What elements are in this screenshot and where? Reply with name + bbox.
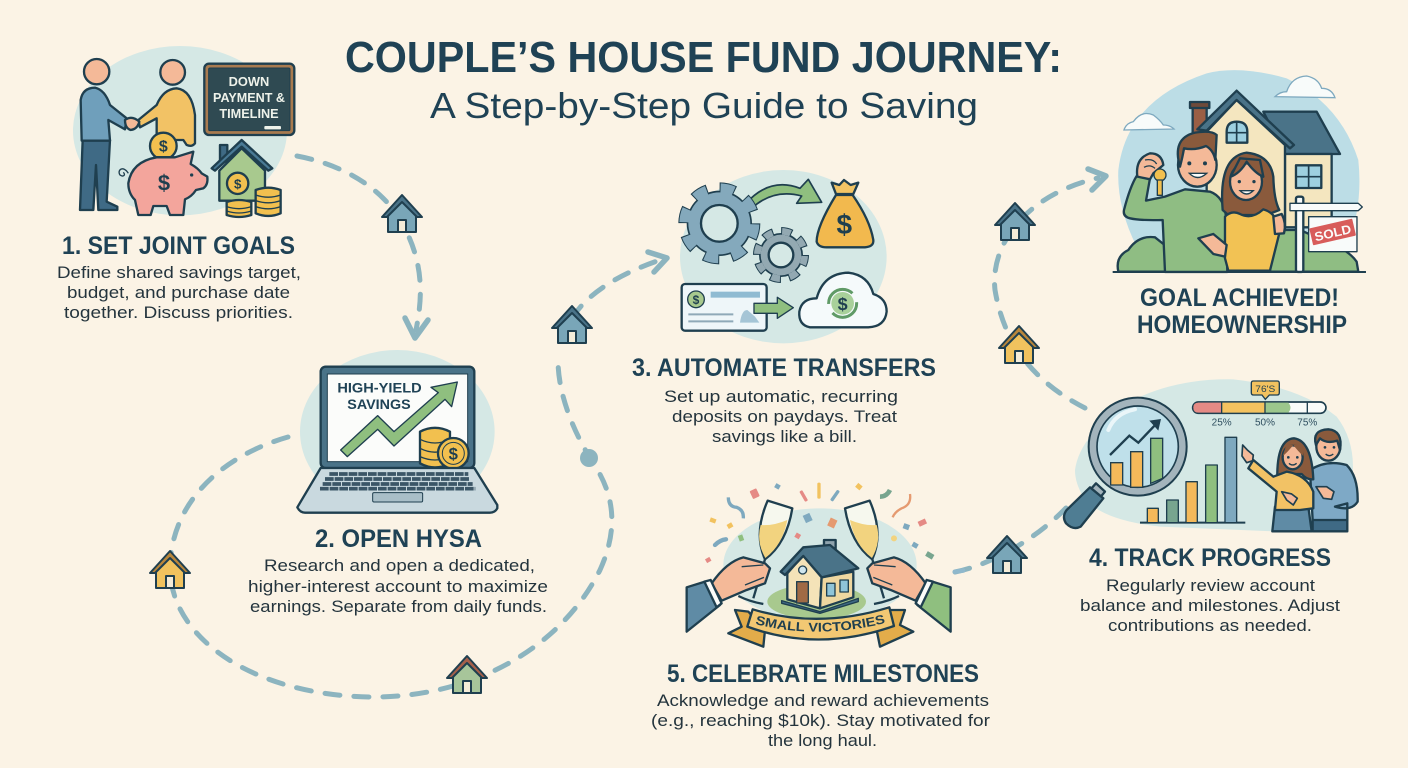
illustration: couple, chalkboard, piggy bank, house: TIMELINE — [219, 106, 279, 121]
illustration: magnifier, bar chart, progress bar, couple: 76'S — [1255, 384, 1275, 394]
text: step 4 description: Regularly review account — [1106, 576, 1315, 595]
panel: step 4 track progress — [1064, 379, 1358, 635]
text: step 5 description: the long haul. — [768, 731, 877, 750]
illustration: couple, chalkboard, piggy bank, house: PAYMENT & — [213, 90, 285, 105]
illustration: laptop with high-yield savings chart: HIGH-YIELD — [337, 379, 422, 395]
bushes — [1118, 230, 1358, 272]
panel: goal achieved — [1113, 70, 1366, 339]
text: step 1 description — [57, 263, 301, 322]
illustration: magnifier, bar chart, progress bar, couple: 25% — [1212, 418, 1232, 429]
illustration: laptop with high-yield savings chart — [297, 350, 497, 513]
text: step 5 description — [651, 691, 990, 750]
heading: step 4: 4. TRACK PROGRESS — [1089, 544, 1331, 572]
illustration: couple with keys in front of sold house — [1113, 70, 1366, 272]
dashed path: step 1 to step 2 — [297, 156, 428, 338]
panel: step 2 open HYSA — [248, 350, 548, 616]
heading: goal achieved — [1137, 284, 1347, 339]
sold sign: SOLD — [1313, 222, 1353, 244]
right glass and hand — [845, 501, 951, 632]
illustration: couple, chalkboard, piggy bank, house: $ — [234, 176, 242, 191]
text: step 5 description: (e.g., reaching $10k). Stay motivated for — [651, 711, 990, 730]
text: step 1 description: together. Discuss priorities. — [64, 303, 293, 322]
text: step 4 description: contributions as needed. — [1108, 616, 1312, 635]
text: step 5 description: Acknowledge and reward achievements — [657, 691, 989, 710]
text: step 2 description: higher-interest account to maximize — [248, 577, 548, 596]
text: step 3 description — [664, 387, 898, 446]
dashed path: step 2 to step 3 — [170, 252, 667, 697]
title: COUPLE’S HOUSE FUND JOURNEY: — [345, 33, 1062, 82]
heading: step 2: 2. OPEN HYSA — [315, 525, 482, 553]
sold sign — [1290, 197, 1362, 272]
house — [781, 540, 858, 613]
clouds — [1124, 76, 1335, 130]
illustration: gears, money bag, card and cloud: $ — [838, 294, 848, 314]
text: step 3 description: Set up automatic, recurring — [664, 387, 898, 406]
heading: goal achieved: HOMEOWNERSHIP — [1137, 311, 1347, 339]
text: step 2 description — [248, 556, 548, 616]
woman — [1198, 153, 1285, 271]
title: A Step-by-Step Guide to Saving — [430, 85, 978, 126]
panel: step 1 set joint goals — [57, 46, 301, 322]
illustration: gears, money bag, card and cloud: $ — [837, 209, 853, 240]
left glass and hand — [687, 501, 792, 632]
text: step 1 description: budget, and purchase date — [67, 283, 290, 302]
illustration: couple, chalkboard, piggy bank, house — [73, 46, 294, 217]
heading: step 5: 5. CELEBRATE MILESTONES — [667, 660, 979, 688]
banner — [727, 606, 914, 648]
illustration: gears, money bag, card and cloud: $ — [693, 293, 700, 307]
illustration: couple, chalkboard, piggy bank, house: DOWN — [229, 74, 269, 89]
text: step 3 description: deposits on paydays. Treat — [672, 407, 897, 426]
banner: SMALL VICTORIES — [756, 615, 884, 632]
text: step 2 description: Research and open a dedicated, — [264, 556, 535, 575]
illustration: magnifier, bar chart, progress bar, couple — [1064, 379, 1358, 531]
panel: step 5 celebrate milestones — [651, 482, 990, 750]
illustration: laptop with high-yield savings chart: SAVINGS — [347, 396, 411, 412]
illustration: magnifier, bar chart, progress bar, couple: 75% — [1297, 418, 1318, 429]
title — [345, 33, 1062, 126]
confetti — [705, 483, 966, 574]
dashed path: step 5 to step 4 — [955, 508, 1066, 572]
illustration: magnifier, bar chart, progress bar, couple: 50% — [1255, 418, 1275, 429]
text: step 4 description: balance and milestones. Adjust — [1080, 596, 1340, 615]
dashed path: step 4 to goal — [995, 169, 1106, 408]
text: step 1 description: Define shared savings target, — [57, 263, 301, 282]
heading: goal achieved: GOAL ACHIEVED! — [1140, 284, 1339, 312]
illustration: champagne toast over house with banner — [686, 482, 965, 648]
illustration: couple, chalkboard, piggy bank, house: $ — [159, 139, 168, 156]
icon: small house markers — [150, 195, 1039, 693]
text: step 4 description — [1080, 576, 1340, 635]
text: step 2 description: earnings. Separate from daily funds. — [250, 597, 547, 616]
illustration: couple, chalkboard, piggy bank, house: $ — [158, 171, 170, 196]
illustration: gears, money bag, card and cloud — [680, 170, 887, 343]
panel: step 3 automate transfers — [632, 170, 936, 446]
heading: step 3: 3. AUTOMATE TRANSFERS — [632, 354, 936, 382]
heading: step 1: 1. SET JOINT GOALS — [62, 232, 295, 260]
man with key — [1124, 132, 1227, 272]
text: step 3 description: savings like a bill. — [712, 427, 857, 446]
illustration: laptop with high-yield savings chart: $ — [449, 444, 459, 463]
